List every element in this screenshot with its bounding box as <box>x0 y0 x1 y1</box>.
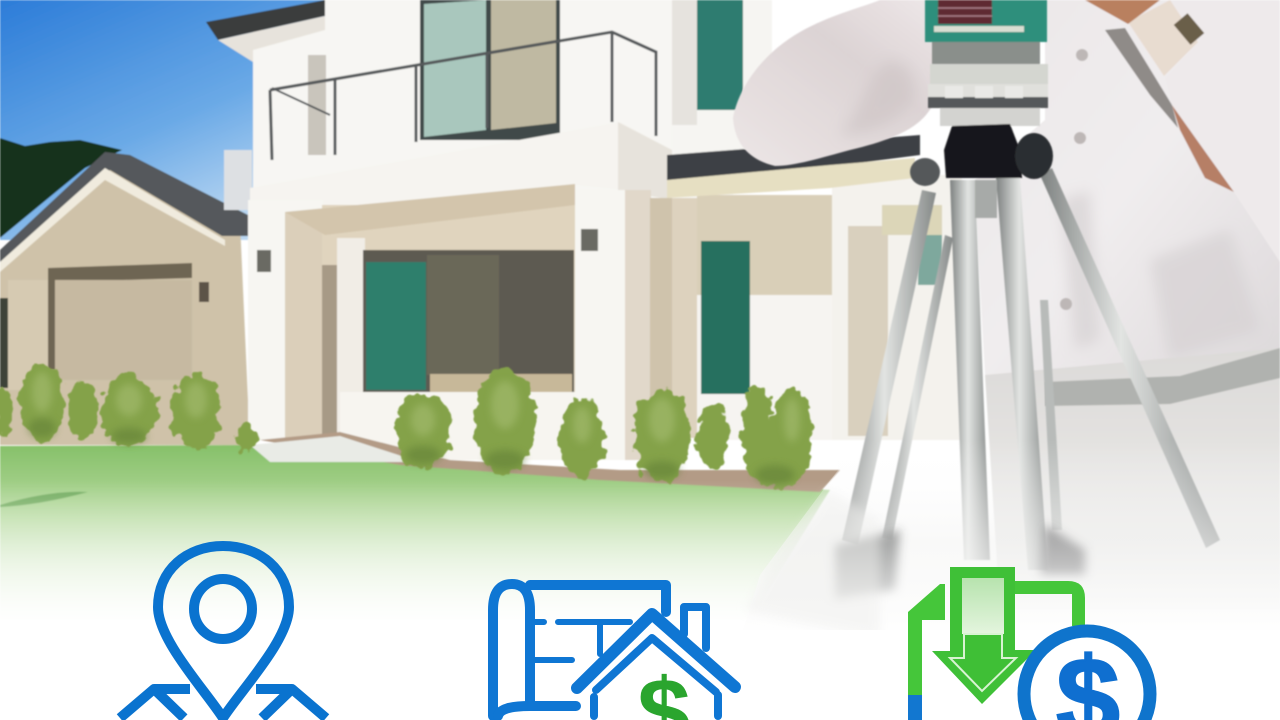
right wing <box>667 135 962 440</box>
trees <box>0 138 122 238</box>
chimney <box>684 607 706 648</box>
ground floor window <box>363 250 574 393</box>
icon: document download with dollar coin <box>908 567 1150 720</box>
sky <box>0 0 330 240</box>
icon: map location pin <box>120 546 326 718</box>
white lower band <box>0 630 1280 720</box>
lawn <box>0 445 830 620</box>
balcony slab <box>250 122 672 212</box>
right window <box>701 241 750 394</box>
shirt folds <box>1060 190 1260 360</box>
main house upper storey <box>206 0 772 212</box>
surveying instrument on tripod <box>842 0 1220 570</box>
tripod legs <box>842 168 1220 570</box>
shirt placket shadow <box>1105 28 1178 128</box>
shrubs <box>0 362 812 489</box>
walkway <box>250 436 420 462</box>
photo background: house and lawn <box>0 0 962 620</box>
blueprint scroll <box>530 585 666 612</box>
hand <box>1085 0 1160 24</box>
right column <box>575 190 625 460</box>
wrist cuff <box>1128 0 1198 76</box>
folded map <box>120 689 326 718</box>
shirt torso <box>975 0 1280 380</box>
tripod head <box>944 124 1022 178</box>
house roof <box>577 614 735 688</box>
trousers <box>985 348 1280 610</box>
surveyor <box>733 0 1280 610</box>
download arrow <box>932 567 1036 704</box>
wall lamps <box>581 229 598 251</box>
shrub shading <box>28 372 800 485</box>
levelling knobs <box>945 86 1023 98</box>
document outline <box>908 584 945 695</box>
watch <box>1174 13 1204 45</box>
balcony railing <box>270 32 656 160</box>
garden bed <box>260 432 840 492</box>
pin outline <box>158 546 289 718</box>
coin ring <box>1024 631 1150 720</box>
arm sleeve <box>733 0 950 166</box>
instrument collar <box>932 42 1040 64</box>
left fade to white <box>0 480 835 630</box>
garage <box>0 150 252 445</box>
diagonal fade edge <box>745 490 880 640</box>
upper window <box>420 0 560 140</box>
instrument body <box>925 0 1047 42</box>
forearm gap skin <box>1172 105 1234 192</box>
tripod knobs <box>1015 133 1053 179</box>
instrument display <box>934 0 1024 32</box>
sleeve folds <box>840 61 915 135</box>
belt <box>1045 348 1280 406</box>
tripod feet <box>835 525 1085 600</box>
right fade to white <box>740 440 1280 640</box>
right upper window <box>697 0 743 110</box>
main house ground floor <box>248 184 698 460</box>
buttons <box>1076 49 1088 61</box>
right sleeve <box>1165 40 1280 262</box>
pin inner circle <box>194 579 252 639</box>
house walls <box>594 638 718 716</box>
lawn shadows <box>0 492 88 507</box>
icon: house plan with dollar <box>493 584 735 720</box>
